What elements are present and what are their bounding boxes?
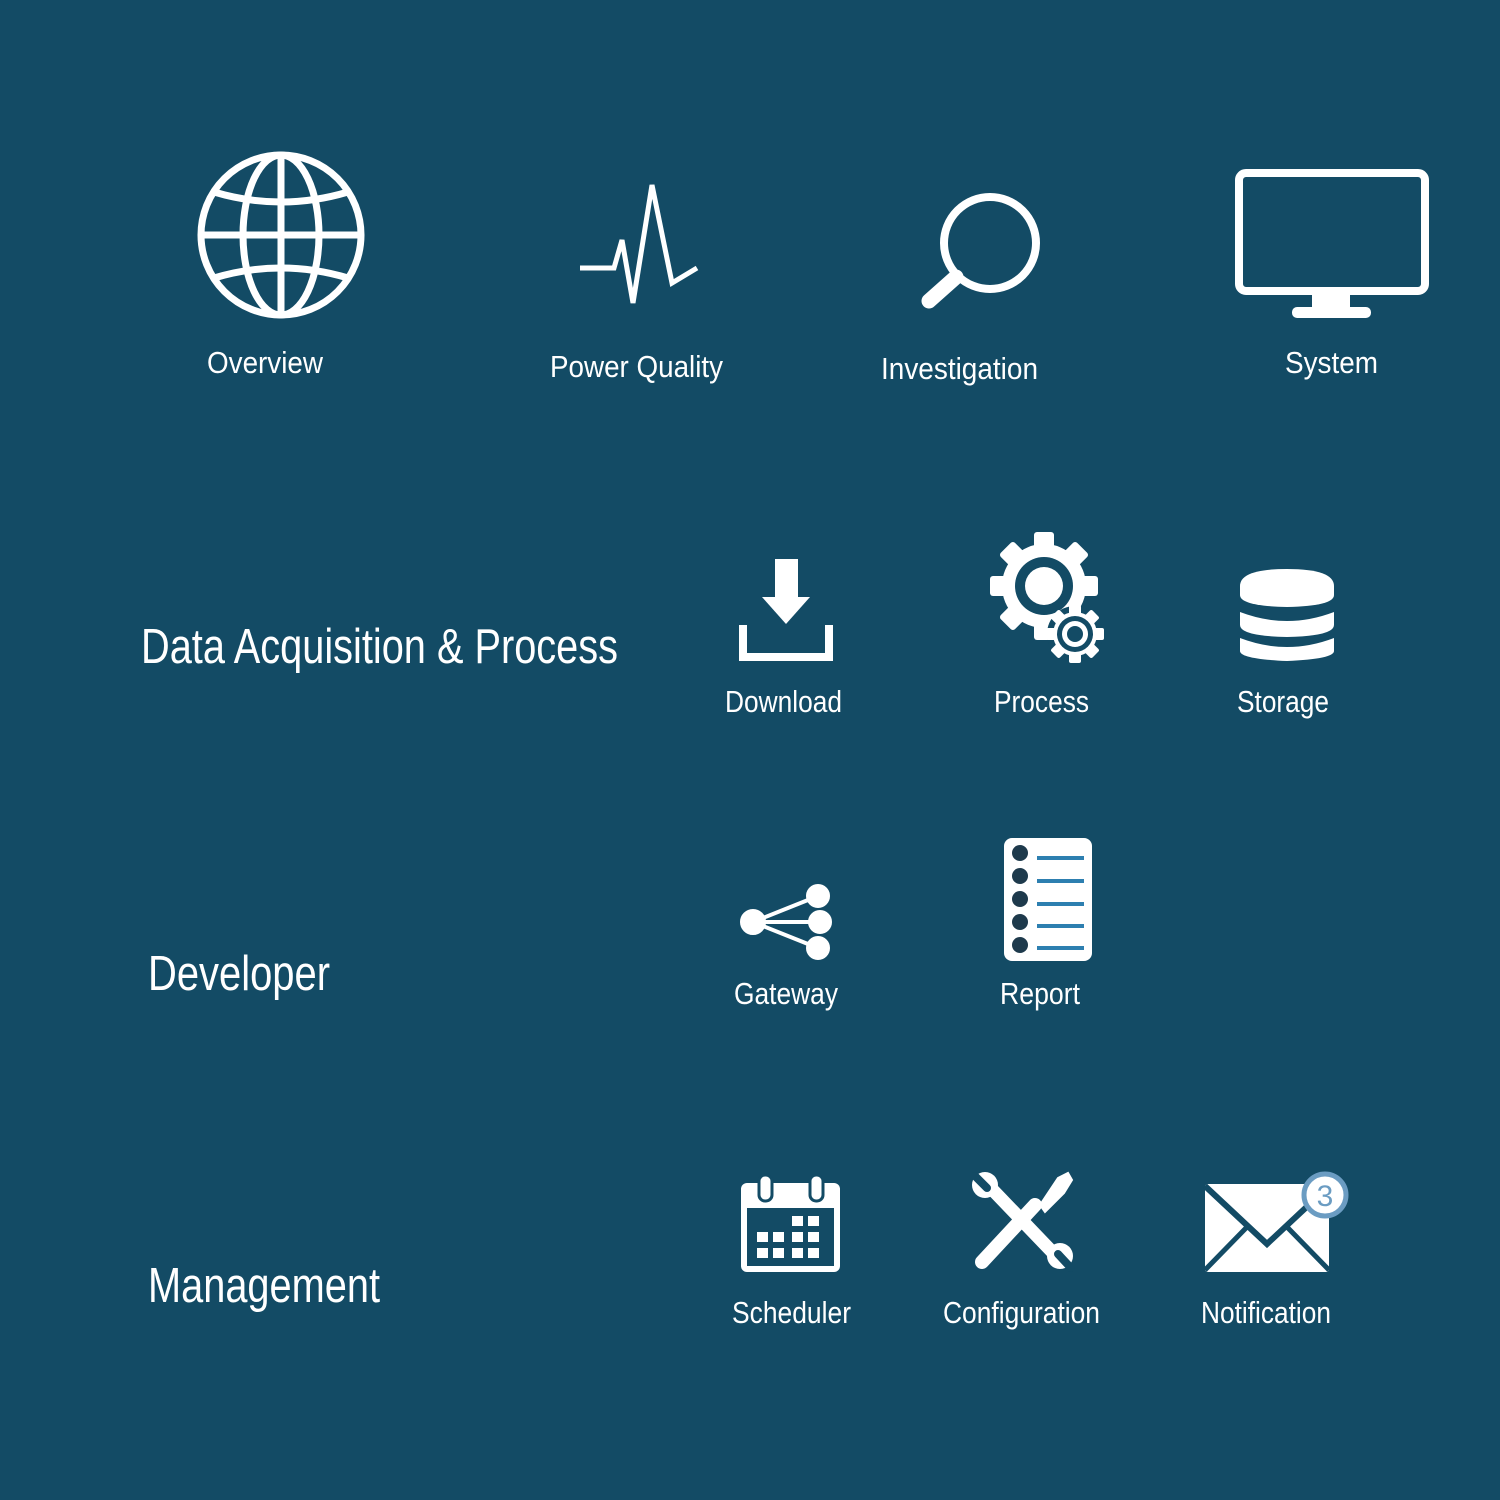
label: System: System (1285, 345, 1378, 380)
icon: pulse (580, 185, 697, 303)
label: Scheduler: Scheduler (732, 1295, 851, 1330)
heading: Developer: Developer (148, 947, 330, 1001)
heading: Management: Management (148, 1259, 380, 1313)
icon: envelope with badge (1205, 1174, 1346, 1272)
icon: gears (990, 532, 1104, 663)
label: Storage: Storage (1237, 684, 1329, 719)
label: Overview: Overview (207, 345, 324, 380)
label: Investigation: Investigation (881, 351, 1038, 386)
icon: globe (201, 155, 361, 315)
label: Process: Process (994, 684, 1089, 719)
icon: storage (1240, 569, 1334, 661)
label: Download: Download (725, 684, 842, 719)
icon: monitor (1239, 173, 1425, 318)
heading: Data Acquisition & Process: Data Acquisition & Process (141, 620, 618, 674)
label: Notification: Notification (1201, 1295, 1331, 1330)
icon: download (743, 559, 829, 657)
label: Configuration: Configuration (943, 1295, 1100, 1330)
label: Gateway: Gateway (734, 976, 838, 1011)
icon: gateway (742, 886, 830, 958)
icon: report (1004, 838, 1092, 961)
icon: calendar (741, 1175, 840, 1272)
icon: envelope with badge: 3 (1317, 1180, 1333, 1213)
label: Report: Report (1000, 976, 1080, 1011)
icon: tools (972, 1172, 1073, 1269)
label: Power Quality: Power Quality (550, 349, 723, 384)
icon: magnifier (929, 197, 1036, 301)
